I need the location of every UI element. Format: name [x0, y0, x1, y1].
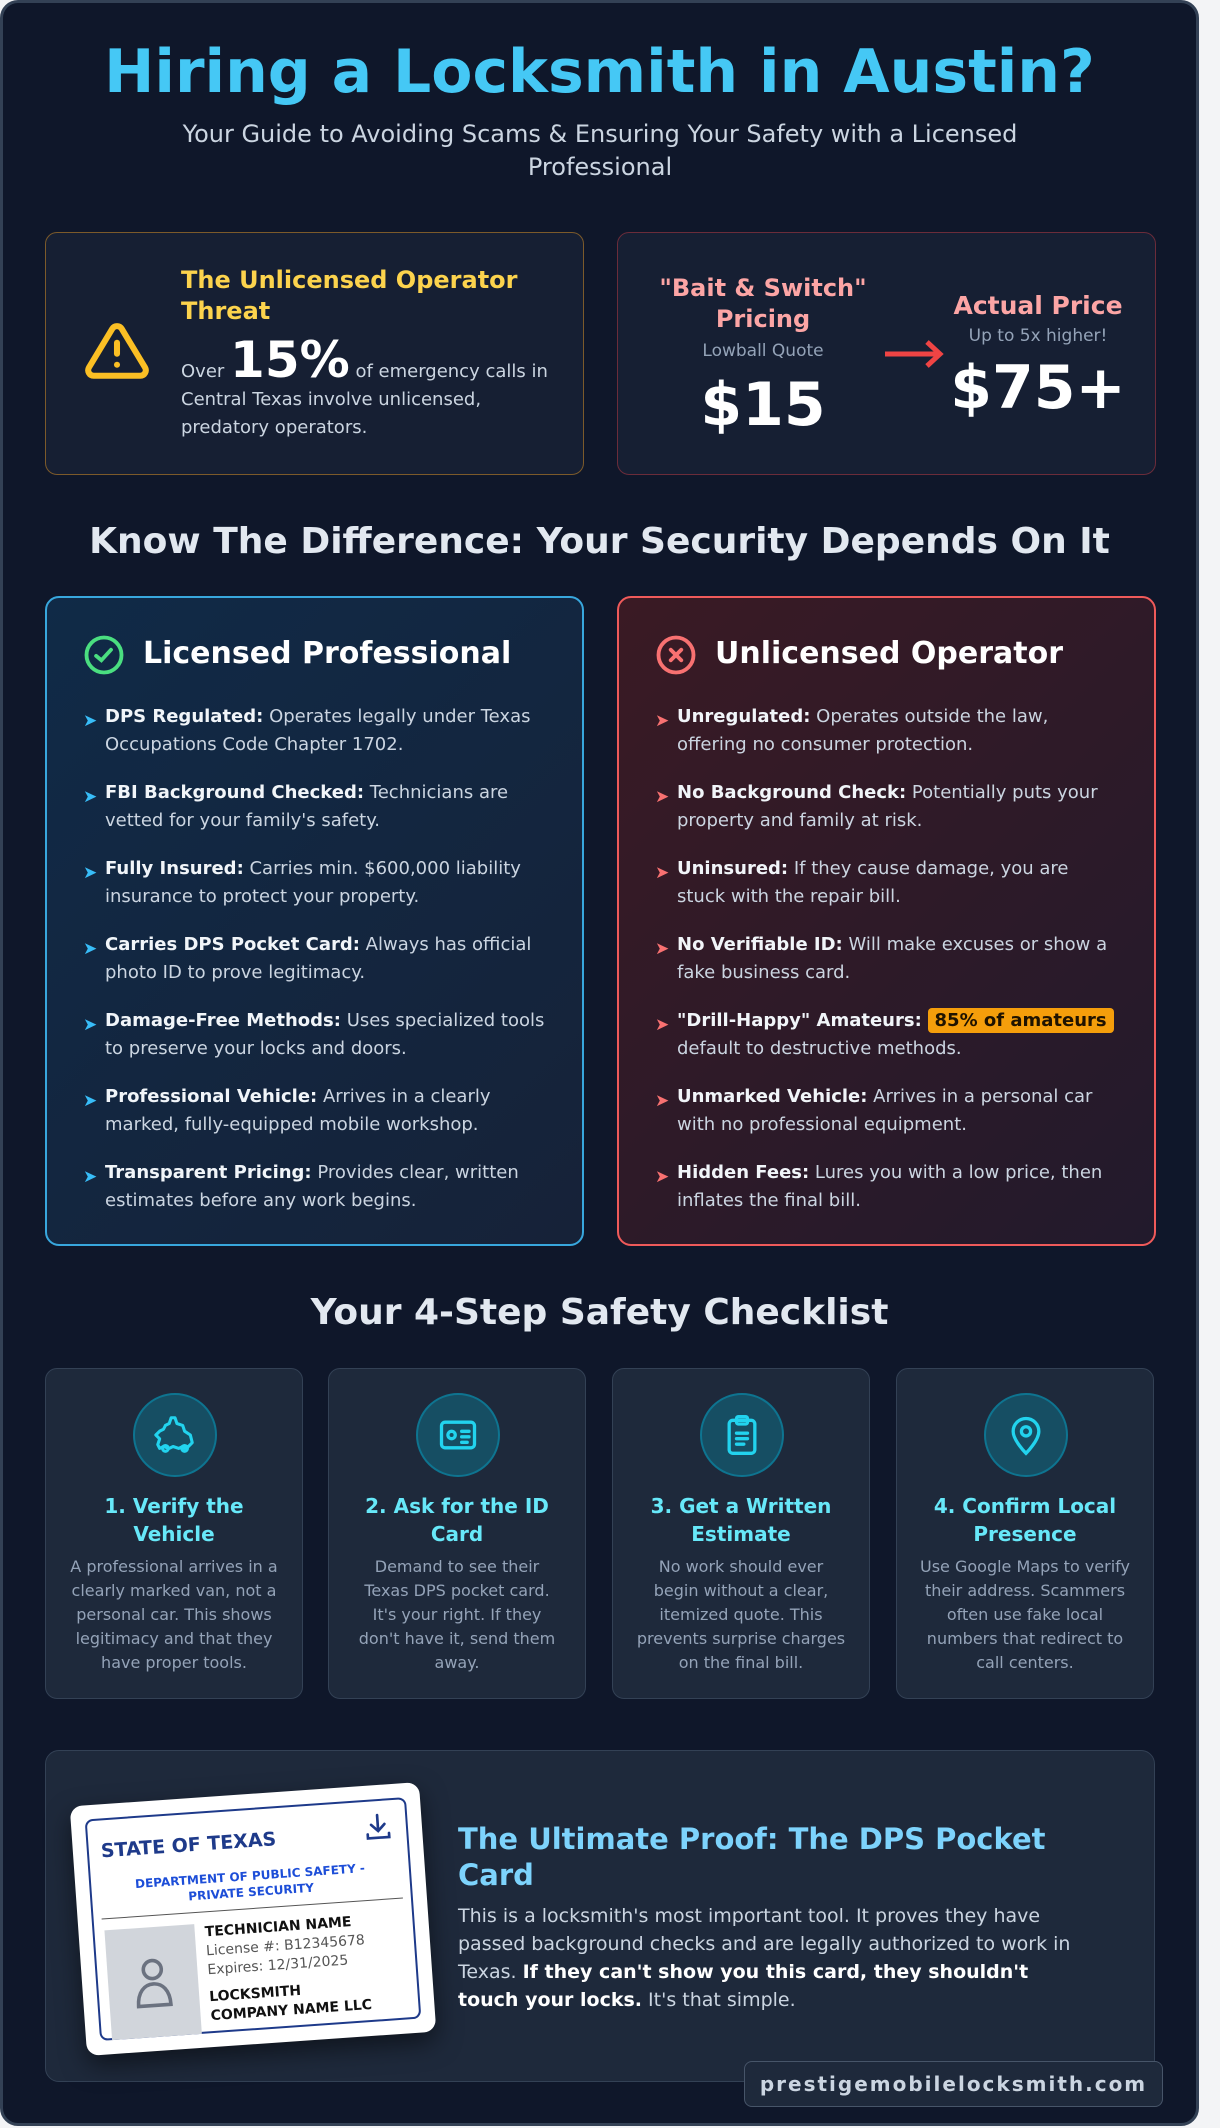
id card illustration: LOCKSMITH [209, 1983, 302, 2005]
unlicensed list: ➤ [655, 787, 669, 807]
step 1 [45, 1368, 303, 1699]
unlicensed list: Unregulated: Operates outside the law, offering no consumer protection. [677, 706, 1048, 755]
id card illustration [70, 1782, 436, 2056]
unlicensed list: ➤ [655, 1015, 669, 1035]
id card illustration: TECHNICIAN NAME [204, 1914, 352, 1940]
icon: id card [416, 1393, 500, 1477]
heading: know the difference: Know The Difference: Your Security Depends On It [89, 521, 1110, 562]
title: Hiring a Locksmith in Austin? [104, 37, 1095, 107]
id card illustration: COMPANY NAME LLC [210, 1997, 373, 2024]
arrow [885, 340, 944, 368]
proof text: This is a locksmith's most important tool. It proves they have passed background checks and are legally authorized to work in Texas. If they can't show you this card, they shouldn't touch your locks. It's that simple. [458, 1905, 1070, 2011]
step 2 [328, 1368, 586, 1699]
licensed list: ➤ [83, 1091, 97, 1111]
licensed list: Damage-Free Methods: Uses specialized tools to preserve your locks and doors. [105, 1010, 544, 1059]
panel: licensed professional [45, 596, 584, 1246]
subtitle: Your Guide to Avoiding Scams & Ensuring Your Safety with a Licensed Professional [183, 120, 1017, 181]
unlicensed list: "Drill-Happy" Amateurs: 85% of amateurs default to destructive methods. [677, 1010, 1107, 1059]
unlicensed list: ➤ [655, 1167, 669, 1187]
icon: warning [85, 323, 149, 379]
step 2: 2. Ask for the ID Card [365, 1494, 549, 1546]
actual price: Up to 5x higher! [969, 326, 1107, 346]
icon: vehicle [133, 1393, 217, 1477]
unlicensed list: Uninsured: If they cause damage, you are stuck with the repair bill. [677, 858, 1069, 907]
panel: DPS pocket card [45, 1750, 1155, 2082]
actual price: Actual Price [953, 291, 1123, 320]
unlicensed list [655, 706, 1114, 1211]
licensed list: Professional Vehicle: Arrives in a clearly marked, fully-equipped mobile workshop. [105, 1086, 491, 1135]
url badge: prestigemobilelocksmith.com [760, 2072, 1147, 2096]
step 3: No work should ever begin without a clear, itemized quote. This prevents surprise charges on the final bill. [637, 1557, 845, 1672]
licensed list: Fully Insured: Carries min. $600,000 liability insurance to protect your property. [105, 858, 521, 907]
actual price: $75+ [950, 353, 1126, 423]
id card illustration: License #: B12345678 [206, 1932, 365, 1959]
actual price [950, 291, 1126, 423]
lowball: "Bait & Switch" Pricing [659, 274, 867, 333]
licensed list: ➤ [83, 939, 97, 959]
licensed list [83, 706, 544, 1211]
licensed list: ➤ [83, 711, 97, 731]
icon: clipboard [700, 1393, 784, 1477]
id card illustration: Expires: 12/31/2025 [207, 1952, 349, 1978]
threat text: Over 15% of emergency calls in Central Texas involve unlicensed, predatory operators. [181, 331, 548, 438]
panel: bait and switch [617, 232, 1156, 475]
unlicensed list: No Verifiable ID: Will make excuses or show a fake business card. [677, 934, 1107, 983]
step 1: 1. Verify the Vehicle [104, 1494, 244, 1546]
panel: unlicensed threat [45, 232, 584, 475]
licensed list: ➤ [83, 863, 97, 883]
licensed list: FBI Background Checked: Technicians are vetted for your family's safety. [105, 782, 508, 831]
icon: check [84, 636, 124, 674]
lowball: Lowball Quote [702, 341, 824, 361]
licensed list: Transparent Pricing: Provides clear, written estimates before any work begins. [105, 1162, 519, 1211]
licensed list: Carries DPS Pocket Card: Always has official photo ID to prove legitimacy. [105, 934, 531, 983]
step 4: 4. Confirm Local Presence [934, 1494, 1116, 1546]
proof heading: The Ultimate Proof: The DPS Pocket Card [458, 1822, 1046, 1892]
lowball [659, 274, 867, 440]
licensed list: DPS Regulated: Operates legally under Texas Occupations Code Chapter 1702. [105, 706, 530, 755]
step 4: Use Google Maps to verify their address. Scammers often use fake local numbers that redirect to call centers. [920, 1557, 1130, 1672]
id card illustration: DEPARTMENT OF PUBLIC SAFETY - PRIVATE SECURITY [135, 1861, 365, 1903]
step 1: A professional arrives in a clearly marked van, not a personal car. This shows legitimacy and that they have proper tools. [70, 1557, 278, 1672]
unlicensed list: Hidden Fees: Lures you with a low price, then inflates the final bill. [677, 1162, 1102, 1211]
icon: x [656, 636, 696, 674]
step 4 [896, 1368, 1154, 1699]
unlicensed list: ➤ [655, 711, 669, 731]
licensed list: ➤ [83, 787, 97, 807]
threat title: The Unlicensed Operator Threat [181, 266, 518, 325]
panel: unlicensed operator [617, 596, 1156, 1246]
id card illustration: STATE OF TEXAS [100, 1828, 277, 1862]
step 2: Demand to see their Texas DPS pocket card. It's your right. If they don't have it, send them away. [359, 1557, 555, 1672]
step 3 [612, 1368, 870, 1699]
unlicensed list: ➤ [655, 939, 669, 959]
unlicensed list: Unmarked Vehicle: Arrives in a personal car with no professional equipment. [677, 1086, 1092, 1135]
url badge [744, 2061, 1163, 2107]
licensed list: ➤ [83, 1015, 97, 1035]
heading: checklist: Your 4-Step Safety Checklist [311, 1292, 888, 1333]
unlicensed list: ➤ [655, 863, 669, 883]
unlicensed title: Unlicensed Operator [715, 636, 1063, 671]
lowball: $15 [700, 370, 826, 440]
step 3: 3. Get a Written Estimate [651, 1494, 831, 1546]
unlicensed list: ➤ [655, 1091, 669, 1111]
unlicensed list: No Background Check: Potentially puts your property and family at risk. [677, 782, 1098, 831]
licensed list: ➤ [83, 1167, 97, 1187]
licensed title: Licensed Professional [143, 636, 511, 671]
icon: map pin [984, 1393, 1068, 1477]
